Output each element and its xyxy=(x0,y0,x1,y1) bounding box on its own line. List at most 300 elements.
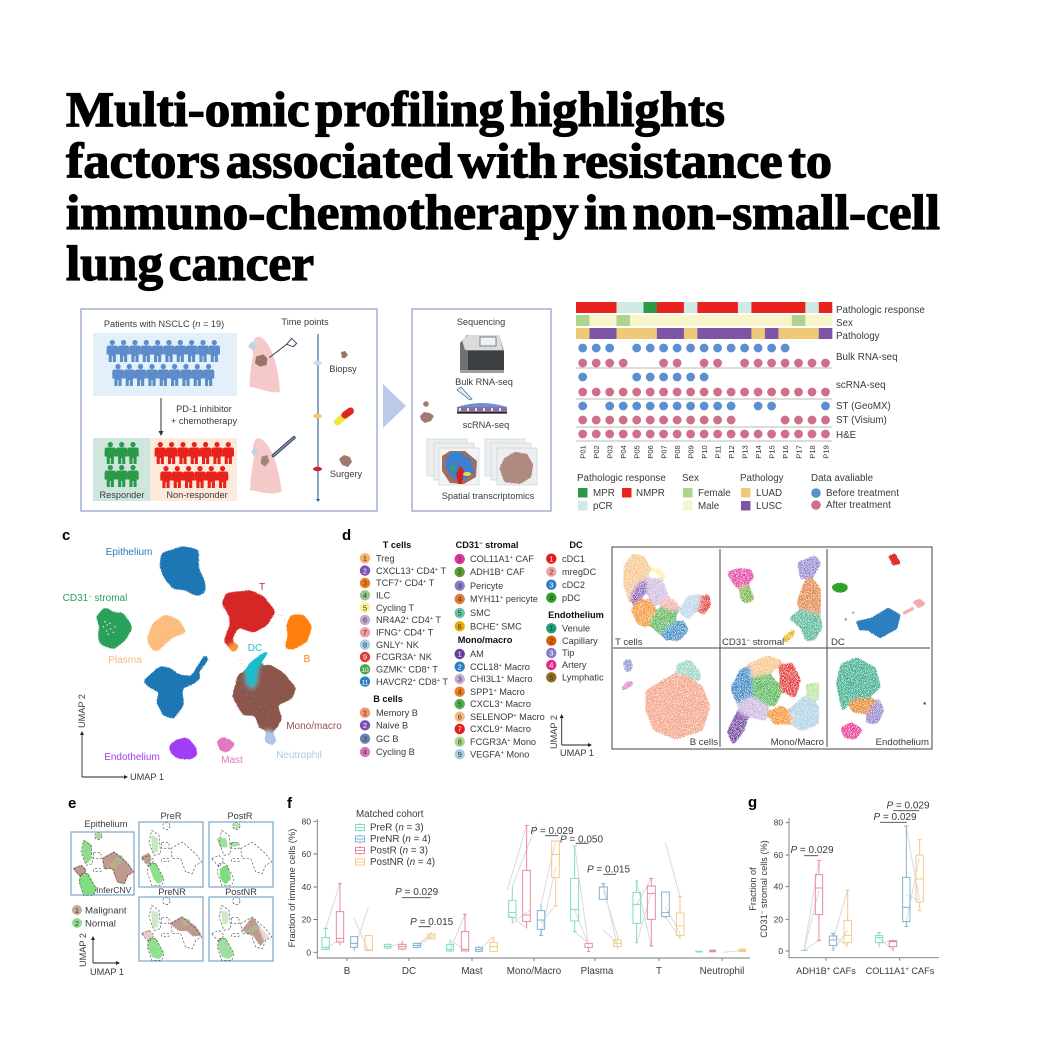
P value annotations: P = 0.015 xyxy=(587,864,630,876)
row dividers xyxy=(576,368,832,441)
malignant/normal legend: Malignant xyxy=(85,906,127,916)
P value annotations: P = 0.050 xyxy=(560,834,603,846)
P value annotations xyxy=(395,826,630,928)
T cells legend: ILC xyxy=(376,590,391,600)
axes: ADH1B xyxy=(796,966,827,976)
panel letter g: g xyxy=(748,794,757,811)
pathologic response row xyxy=(576,302,832,313)
sex row xyxy=(576,315,832,326)
mono/macro legend: 9 xyxy=(458,750,462,759)
mono/macro legend: SELENOP xyxy=(470,712,513,722)
mono/macro legend: + xyxy=(500,700,503,706)
heatmap legend: Data avaliable xyxy=(811,473,874,484)
axes: 0 xyxy=(306,947,311,957)
icon: Visium slides xyxy=(485,439,537,485)
T cells legend: CD8 xyxy=(406,664,427,674)
T cells legend: T xyxy=(430,664,438,674)
axes: DC xyxy=(402,966,416,977)
CD31 stromal legend: + xyxy=(496,622,499,628)
axes: 40 xyxy=(774,882,783,892)
row labels: Pathologic response xyxy=(836,305,925,316)
endothelium legend: Lymphatic xyxy=(562,672,604,682)
UMAP clusters xyxy=(97,547,312,759)
box plots left half xyxy=(322,823,537,952)
DC legend xyxy=(546,540,597,603)
patient labels: P06 xyxy=(646,445,655,459)
T cells legend: + xyxy=(399,579,402,585)
T cells legend: IFNG xyxy=(376,628,398,638)
endothelium legend: 5 xyxy=(549,673,553,682)
title xyxy=(66,81,940,291)
CD31 stromal legend: CD31 xyxy=(456,540,479,550)
T cells legend: + xyxy=(413,678,416,684)
cluster labels: Mast xyxy=(221,755,243,766)
CD31 stromal legend: pericyte xyxy=(503,594,538,604)
T cells legend: NK xyxy=(404,640,420,650)
axes: stromal cells (%) xyxy=(759,840,769,911)
icon: GeoMx slides xyxy=(427,439,479,485)
mono/macro legend: + xyxy=(499,663,502,669)
map labels: stromal xyxy=(750,637,784,648)
mono/macro legend xyxy=(454,635,545,760)
B cells legend xyxy=(360,694,418,757)
CD31 stromal legend: 1 xyxy=(458,555,462,564)
T cells legend: T xyxy=(433,615,441,625)
PreNR map: PreNR xyxy=(158,887,186,897)
legend: matched cohort: PreNR (n = 4) xyxy=(370,834,431,845)
patient labels: P13 xyxy=(740,445,749,459)
CD31 stromal legend: 2 xyxy=(458,568,462,577)
DC legend: 2 xyxy=(549,567,553,576)
row labels: Bulk RNA-seq xyxy=(836,352,898,363)
T cells legend: 2 xyxy=(363,566,367,575)
sequencing heading: Sequencing xyxy=(457,317,505,327)
panel letter e: e xyxy=(68,795,76,812)
PostR map: PostR xyxy=(227,811,253,821)
treatment label: PD-1 inhibitor xyxy=(176,404,232,414)
box plots xyxy=(801,826,923,951)
DC legend: 3 xyxy=(549,580,553,589)
B cells map xyxy=(622,660,709,738)
mono/macro legend: Mono/macro xyxy=(458,635,513,645)
T cells legend: NK xyxy=(416,652,433,662)
legend: matched cohort: PreR (n = 3) xyxy=(370,822,424,834)
panel d: subtype UMAP grid xyxy=(612,547,932,749)
patient labels: P04 xyxy=(619,445,628,459)
heatmap legend: Sex xyxy=(682,473,699,484)
T cells legend: + xyxy=(422,628,425,634)
endothelium legend: 3 xyxy=(549,649,553,658)
axes: T xyxy=(656,966,662,977)
mono/macro legend: VEGFA xyxy=(470,750,501,760)
CD31 stromal legend: 6 xyxy=(458,622,462,631)
heatmap legend: Female xyxy=(698,488,731,499)
axes: B xyxy=(344,966,351,977)
axes: CAFs xyxy=(909,966,935,976)
arrow: to sequencing xyxy=(383,384,406,428)
axes: Neutrophil xyxy=(700,966,744,977)
cluster labels: Endothelium xyxy=(104,752,160,763)
DC legend: cDC1 xyxy=(562,554,585,564)
DC map xyxy=(833,554,925,638)
T cells legend: + xyxy=(435,567,438,573)
axes: Mono/Macro xyxy=(507,966,562,977)
T cells legend: NR4A2 xyxy=(376,615,406,625)
icon: drug capsule xyxy=(338,411,350,422)
T cells legend: GZMK xyxy=(376,664,403,674)
mono/macro legend: FCGR3A xyxy=(470,737,507,747)
map labels: T cells xyxy=(615,637,643,648)
T cells legend: TCF7 xyxy=(376,578,399,588)
axes xyxy=(748,818,939,976)
mono/macro legend: Mono xyxy=(510,737,536,747)
axes: + xyxy=(827,967,831,973)
panel letter f: f xyxy=(287,795,293,812)
cluster labels: − xyxy=(88,594,92,600)
title: factors associated with resistance to xyxy=(66,132,832,188)
panel letter c: c xyxy=(62,527,70,544)
mono/macro legend: 3 xyxy=(458,675,462,684)
row labels: H&E xyxy=(836,430,857,441)
CD31 stromal map xyxy=(728,557,822,642)
UMAP axes: UMAP 1 xyxy=(130,772,164,782)
patient labels: P10 xyxy=(700,445,709,459)
DC legend: 1 xyxy=(549,554,553,563)
mono/macro legend: 6 xyxy=(458,712,462,721)
UMAP axes e: UMAP 2 xyxy=(78,933,88,967)
panel letter d: d xyxy=(342,527,351,544)
map frame xyxy=(612,547,932,749)
surgery label: Surgery xyxy=(330,469,362,479)
mono/macro legend: + xyxy=(494,688,497,694)
mono/macro legend: Macro xyxy=(517,712,545,722)
B cells legend: GC B xyxy=(376,734,398,744)
T cells legend: 7 xyxy=(363,628,367,637)
row labels: ST (Visium) xyxy=(836,415,887,426)
panel g: stromal fractions box plot xyxy=(748,794,939,976)
endothelium legend: 4 xyxy=(549,661,553,670)
DC legend: pDC xyxy=(562,593,581,603)
CD31 stromal legend: + xyxy=(500,595,503,601)
patient labels: P07 xyxy=(659,445,668,459)
patient labels: P18 xyxy=(808,445,817,459)
DC legend: 4 xyxy=(549,593,553,602)
heatmap legend: After treatment xyxy=(826,500,891,511)
scRNA-seq label: scRNA-seq xyxy=(463,420,509,430)
heatmap legend: Pathologic response xyxy=(577,473,666,484)
title: immuno-chemotherapy in non-small-cell xyxy=(66,184,940,240)
patient labels: P03 xyxy=(606,445,614,459)
T cells legend: + xyxy=(423,579,426,585)
heatmap legend: Before treatment xyxy=(826,488,899,499)
CD31 stromal legend: MYH11 xyxy=(470,594,500,604)
DC legend: mregDC xyxy=(562,567,597,577)
P value annotations: P = 0.029 xyxy=(790,845,834,856)
PostNR map: PostNR xyxy=(225,887,257,897)
axes: 0 xyxy=(778,946,783,956)
legend: matched cohort xyxy=(356,809,435,868)
patient labels: P16 xyxy=(781,445,790,459)
non-responder label: Non-responder xyxy=(166,490,228,500)
panel a: study design xyxy=(81,309,377,511)
PostNR map xyxy=(209,887,273,961)
PreR map xyxy=(139,811,203,887)
endothelium legend: 1 xyxy=(549,624,553,633)
mono/macro legend: + xyxy=(501,675,504,681)
cluster labels: T xyxy=(259,582,265,593)
mono/macro legend: Macro xyxy=(504,674,532,684)
T cells legend: + xyxy=(427,666,430,672)
patient labels: P05 xyxy=(632,445,642,459)
CD31 stromal legend: 3 xyxy=(458,581,462,590)
patient labels: P08 xyxy=(673,445,682,459)
T cells legend: + xyxy=(430,616,433,622)
UMAP axes small: UMAP 1 xyxy=(560,748,594,758)
axes: 20 xyxy=(774,914,783,924)
legend: matched cohort: PostNR (n = 4) xyxy=(370,857,435,868)
endothelium legend: Tip xyxy=(562,648,574,658)
endothelium legend: Endothelium xyxy=(548,610,604,620)
malignant/normal legend: 2 xyxy=(75,919,79,928)
cluster labels: CD31 xyxy=(63,593,88,604)
axes: Plasma xyxy=(581,966,614,977)
mono/macro legend: Mono xyxy=(504,750,529,760)
P value annotations: P = 0.029 xyxy=(530,826,574,837)
mono/macro legend: + xyxy=(501,750,504,756)
DC legend: cDC2 xyxy=(562,580,585,590)
mono/macro legend: 2 xyxy=(458,662,462,671)
mono/macro legend: Macro xyxy=(502,662,530,672)
cluster labels: DC xyxy=(248,643,262,654)
CD31 stromal legend xyxy=(454,540,538,632)
PostR map xyxy=(209,811,273,887)
T cells legend: + xyxy=(413,653,416,659)
T cells legend: T xyxy=(440,677,448,687)
map labels: B cells xyxy=(690,737,718,748)
B cells legend: Memory B xyxy=(376,708,418,718)
axes: − xyxy=(760,910,766,914)
patient labels: P12 xyxy=(727,445,736,459)
heatmap legend: LUAD xyxy=(756,488,782,499)
row labels: Sex xyxy=(836,318,853,329)
panel b: patient data heatmap xyxy=(576,302,925,512)
T cells legend: CD4 xyxy=(414,566,435,576)
CD31 stromal legend: SMC xyxy=(470,608,491,618)
endothelium legend: Capillary xyxy=(562,636,598,646)
B cells legend: 2 xyxy=(363,721,367,730)
mono/macro legend: CXCL9 xyxy=(470,724,500,734)
malignant/normal legend: 1 xyxy=(75,906,79,915)
endothelium legend xyxy=(546,610,604,682)
axes: COL11A1 xyxy=(866,966,905,976)
patient labels: P15 xyxy=(767,445,776,459)
icon: biopsy lung xyxy=(248,337,297,392)
mono/macro legend: CHI3L1 xyxy=(470,674,501,684)
patient cohort heading: Patients with NSCLC (n = 19) xyxy=(104,319,224,329)
CD31 stromal legend: 4 xyxy=(458,595,462,604)
T cells legend: 11 xyxy=(362,679,369,686)
map labels xyxy=(615,637,929,748)
main InferCNV map xyxy=(71,819,134,895)
PreR map: PreR xyxy=(161,811,182,821)
icon: tissue samples xyxy=(420,401,434,423)
B cells legend: Cycling B xyxy=(376,747,415,757)
P value annotations: P = 0.029 xyxy=(886,800,930,812)
patient labels: P19 xyxy=(821,445,830,459)
legend: matched cohort: PostR (n = 3) xyxy=(370,846,428,856)
axes: Fraction of immune cells (%) xyxy=(286,829,297,947)
endothelium legend: 2 xyxy=(549,636,553,645)
time points heading: Time points xyxy=(281,317,329,327)
T cells legend: T xyxy=(438,566,446,576)
T cells legend: 9 xyxy=(363,653,367,662)
patient labels: P02 xyxy=(592,445,601,459)
axes: CD31 xyxy=(759,914,769,938)
mono/macro legend: 8 xyxy=(458,737,462,746)
CD31 stromal legend: SMC xyxy=(499,622,522,632)
T cells legend: T cells xyxy=(383,540,411,550)
CD31 stromal legend: stromal xyxy=(483,540,518,550)
row labels: ST (GeoMX) xyxy=(836,401,891,412)
CD31 stromal legend: − xyxy=(479,541,483,547)
B cells legend: 1 xyxy=(363,708,367,717)
T cells legend: CD8 xyxy=(416,677,437,687)
icon: surgery tumour xyxy=(339,455,352,467)
T cells legend: CD4 xyxy=(409,615,430,625)
heatmap legend: pCR xyxy=(593,501,613,512)
panel a: sequencing xyxy=(412,309,551,511)
axes: 40 xyxy=(302,882,311,892)
axes: 80 xyxy=(774,818,783,828)
CD31 stromal legend: CAF xyxy=(504,567,525,577)
UMAP axes e: UMAP 1 xyxy=(90,967,124,977)
non-responder group xyxy=(150,438,237,501)
CD31 stromal legend: COL11A1 xyxy=(470,554,510,564)
T cells legend: 3 xyxy=(363,579,367,588)
mono/macro legend: CXCL3 xyxy=(470,699,500,709)
UMAP axes: UMAP 2 xyxy=(77,694,87,728)
arrow: treatment xyxy=(158,398,164,436)
mono/macro legend: 1 xyxy=(458,650,462,659)
T cells legend: + xyxy=(411,567,414,573)
T cells legend: CD4 xyxy=(402,578,423,588)
mono/macro legend: CCL18 xyxy=(470,662,499,672)
biopsy label: Biopsy xyxy=(329,364,357,374)
mono/macro legend: 5 xyxy=(458,700,462,709)
T cells legend: + xyxy=(400,641,404,647)
axes xyxy=(286,816,750,977)
T cells legend: T xyxy=(426,578,435,588)
patient labels: P09 xyxy=(686,445,695,459)
B cells legend: Naive B xyxy=(376,720,408,730)
timeline xyxy=(313,334,322,502)
DC legend: DC xyxy=(569,540,583,550)
B cells legend: 4 xyxy=(363,748,367,757)
mono/macro legend: + xyxy=(507,738,510,744)
data availability dots: before treatment xyxy=(583,348,826,406)
map labels: CD31 xyxy=(722,637,747,648)
icon: surgery lung xyxy=(250,438,294,494)
T cells legend: 10 xyxy=(361,667,369,674)
Mono/Macro map xyxy=(728,657,818,743)
P value annotations: P = 0.029 xyxy=(873,812,917,823)
responder label: Responder xyxy=(100,490,144,500)
axes: 60 xyxy=(302,849,311,859)
heatmap legend: LUSC xyxy=(756,501,782,512)
cluster labels: Epithelium xyxy=(106,547,152,558)
heatmap legend: NMPR xyxy=(636,488,665,499)
B cells legend: B cells xyxy=(373,694,403,704)
T cells legend: 4 xyxy=(363,591,367,600)
InferCNV label: InferCNV xyxy=(96,885,132,895)
T cells legend: FCGR3A xyxy=(376,652,413,662)
cluster labels: stromal xyxy=(92,593,127,604)
patient labels: P17 xyxy=(794,445,803,459)
T cells legend: 6 xyxy=(363,616,367,625)
mono/macro legend: SPP1 xyxy=(470,687,494,697)
panel d: cell subtype legend xyxy=(342,527,604,760)
T cells legend: GNLY xyxy=(376,640,400,650)
patient labels: P11 xyxy=(713,446,722,458)
CD31 stromal legend: + xyxy=(501,568,504,574)
T cells legend: + xyxy=(398,628,401,634)
UMAP axes small xyxy=(549,714,594,758)
title: Multi-omic profiling highlights xyxy=(66,81,725,137)
patient cohort icons xyxy=(93,333,237,396)
T cells legend: CXCL13 xyxy=(376,566,411,576)
map labels: − xyxy=(747,638,751,644)
spatial transcriptomics label: Spatial transcriptomics xyxy=(442,491,535,501)
legend: matched cohort: Matched cohort xyxy=(356,809,424,820)
Endothelium map xyxy=(837,658,926,738)
row labels: scRNA-seq xyxy=(836,380,886,391)
cluster labels: Neutrophil xyxy=(276,750,322,761)
axes: 60 xyxy=(774,850,783,860)
bulk RNA-seq label: Bulk RNA-seq xyxy=(455,377,513,387)
CD31 stromal legend: CAF xyxy=(513,554,534,564)
main InferCNV map: Epithelium xyxy=(85,819,128,829)
mono/macro legend: 4 xyxy=(458,687,462,696)
patient labels: P14 xyxy=(754,445,763,459)
panel c: UMAP of all cells xyxy=(62,527,342,782)
endothelium legend: Artery xyxy=(562,660,587,670)
mono/macro legend: + xyxy=(500,725,503,731)
map labels: DC xyxy=(831,637,845,648)
patient labels: P01 xyxy=(578,445,588,459)
axes: 80 xyxy=(302,816,311,826)
B cells legend: 3 xyxy=(363,734,367,743)
icon: chip and pipette xyxy=(457,387,507,414)
panel f: immune fractions box plot xyxy=(286,795,750,977)
T cells legend: HAVCR2 xyxy=(376,677,413,687)
icon: sequencer xyxy=(460,335,504,373)
T cells legend: + xyxy=(406,616,409,622)
P value annotations: P = 0.015 xyxy=(410,917,454,928)
cluster labels xyxy=(63,547,342,766)
T cells legend: T xyxy=(425,628,434,638)
T cells legend xyxy=(360,540,448,687)
mono/macro legend: Macro xyxy=(503,699,531,709)
T cells legend: + xyxy=(437,678,440,684)
responder group xyxy=(93,438,150,501)
CD31 stromal legend: Pericyte xyxy=(470,581,503,591)
mono/macro legend: Macro xyxy=(497,687,525,697)
CD31 stromal legend: + xyxy=(510,555,513,561)
malignant/normal legend: Normal xyxy=(85,918,116,930)
T cells legend: Treg xyxy=(376,554,395,564)
mono/macro legend: Macro xyxy=(503,724,531,734)
CD31 stromal legend: ADH1B xyxy=(470,567,501,577)
